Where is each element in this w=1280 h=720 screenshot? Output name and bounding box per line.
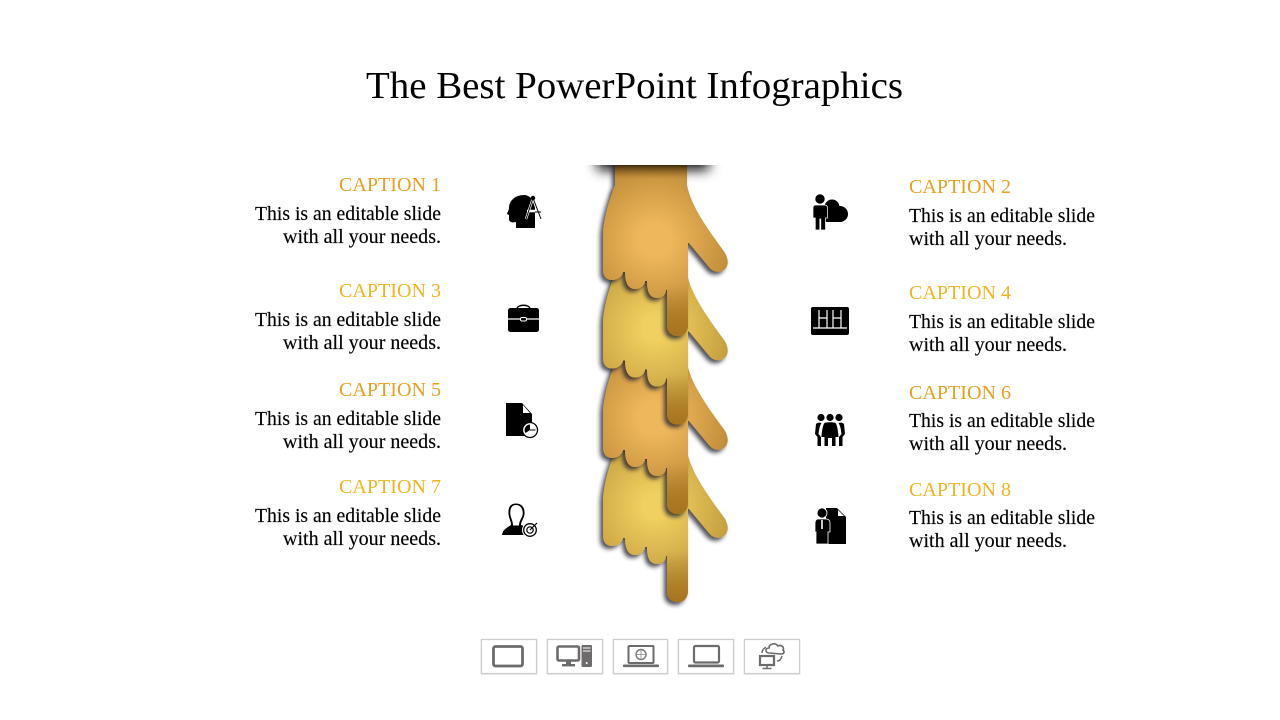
caption 5: This is an editable slide: [255, 408, 441, 430]
caption 4: CAPTION 4: [909, 282, 1011, 304]
top shadow: [597, 150, 709, 170]
caption 4: with all your needs.: [909, 334, 1067, 356]
caption 2: This is an editable slide: [909, 205, 1095, 227]
icon: laptop: [678, 640, 734, 674]
title: The Best PowerPoint Infographics: [366, 65, 903, 107]
icon: person with cloud: [813, 194, 848, 230]
caption 6: [909, 382, 1095, 455]
caption 7: [255, 476, 441, 550]
caption 7: CAPTION 7: [339, 476, 441, 498]
caption 6: with all your needs.: [909, 433, 1067, 455]
caption 2: [909, 176, 1095, 250]
icon: person with document: [815, 508, 846, 544]
caption 3: CAPTION 3: [339, 280, 441, 302]
caption 5: with all your needs.: [283, 431, 441, 453]
caption 2: with all your needs.: [909, 228, 1067, 250]
caption 5: CAPTION 5: [339, 379, 441, 401]
icon: head with compass: [507, 195, 541, 228]
caption 1: CAPTION 1: [339, 174, 441, 196]
caption 1: with all your needs.: [283, 226, 441, 248]
caption 3: [255, 280, 441, 354]
stacked pointing hands: [597, 100, 728, 602]
caption 7: This is an editable slide: [255, 505, 441, 527]
caption 6: CAPTION 6: [909, 382, 1011, 404]
caption 5: [255, 379, 441, 453]
hand 3: [603, 278, 728, 514]
left captions: [255, 174, 441, 550]
icon: document with pie: [506, 403, 538, 438]
hand 2: [603, 188, 728, 424]
caption 3: with all your needs.: [283, 332, 441, 354]
caption 7: with all your needs.: [283, 528, 441, 550]
caption 8: This is an editable slide: [909, 507, 1095, 529]
icon: laptop with globe: [614, 640, 668, 674]
wrist shading: [615, 165, 687, 178]
caption 8: with all your needs.: [909, 530, 1067, 552]
icon: briefcase: [508, 305, 539, 332]
caption 6: This is an editable slide: [909, 410, 1095, 432]
icon: person with target: [502, 504, 538, 538]
hand 1: [596, 165, 728, 342]
caption 4: [909, 282, 1095, 356]
caption 3: This is an editable slide: [255, 309, 441, 331]
caption 8: [909, 479, 1095, 552]
right captions: [909, 176, 1095, 552]
icon: cloud and monitor sync: [744, 640, 800, 674]
icon: tablet: [482, 640, 536, 674]
caption 4: This is an editable slide: [909, 311, 1095, 333]
caption 2: CAPTION 2: [909, 176, 1011, 198]
caption 8: CAPTION 8: [909, 479, 1011, 501]
icon: three people: [815, 414, 845, 446]
device icons row: [482, 640, 800, 674]
caption 1: This is an editable slide: [255, 203, 441, 225]
icon: desktop computer: [548, 640, 602, 674]
hand 4: [603, 366, 728, 602]
icon: panel: [811, 307, 849, 335]
caption 1: [255, 174, 441, 248]
